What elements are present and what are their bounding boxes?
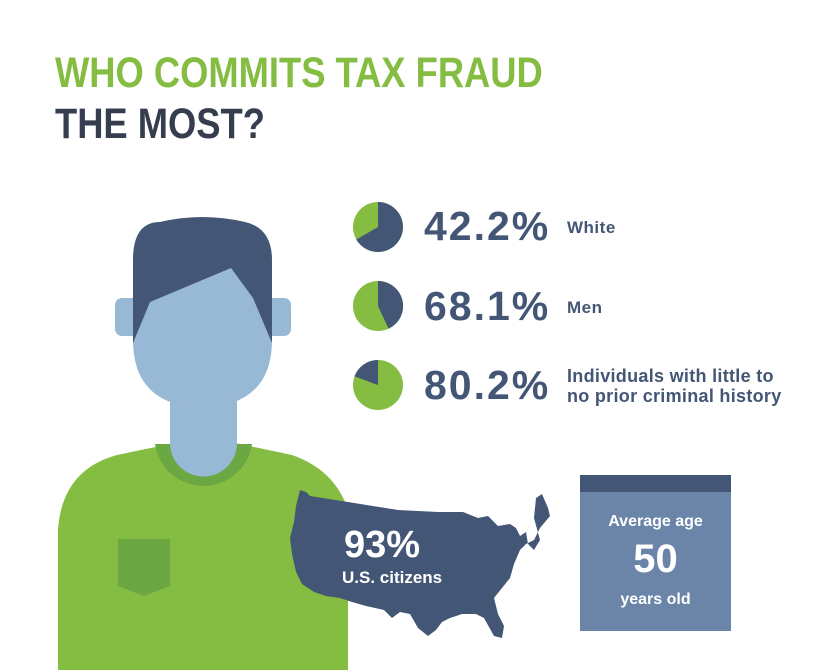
ears bbox=[115, 298, 291, 336]
map: US citizens bbox=[290, 490, 550, 638]
shirt bbox=[58, 442, 348, 670]
calendar: average age: years old bbox=[620, 591, 691, 608]
pocket bbox=[118, 539, 170, 596]
text: Men bbox=[567, 298, 602, 317]
pie: criminal history 80.2% bbox=[353, 360, 403, 410]
pie: white 42.2% bbox=[353, 202, 403, 252]
text: Individuals with little to bbox=[567, 366, 774, 386]
subtitle: THE MOST? bbox=[55, 100, 265, 148]
hair bbox=[133, 217, 272, 343]
face bbox=[133, 260, 272, 408]
map label: 93% bbox=[344, 524, 420, 566]
title: WHO COMMITS TAX FRAUD bbox=[55, 49, 543, 97]
text: White bbox=[567, 218, 616, 237]
collar bbox=[155, 444, 252, 486]
pie: men 68.1% bbox=[353, 281, 403, 331]
stat: 42.2% White: 42.2% bbox=[424, 203, 550, 249]
stat: 80.2%: 80.2% bbox=[424, 362, 550, 408]
calendar: average age: Average age bbox=[608, 513, 703, 530]
stat: 68.1% Men: 68.1% bbox=[424, 283, 550, 329]
text: no prior criminal history bbox=[567, 386, 782, 406]
map: US citizens: U.S. citizens bbox=[342, 568, 442, 587]
calendar: average age bbox=[580, 475, 731, 631]
calendar: average age: 50 bbox=[633, 537, 678, 581]
neck bbox=[170, 390, 237, 476]
